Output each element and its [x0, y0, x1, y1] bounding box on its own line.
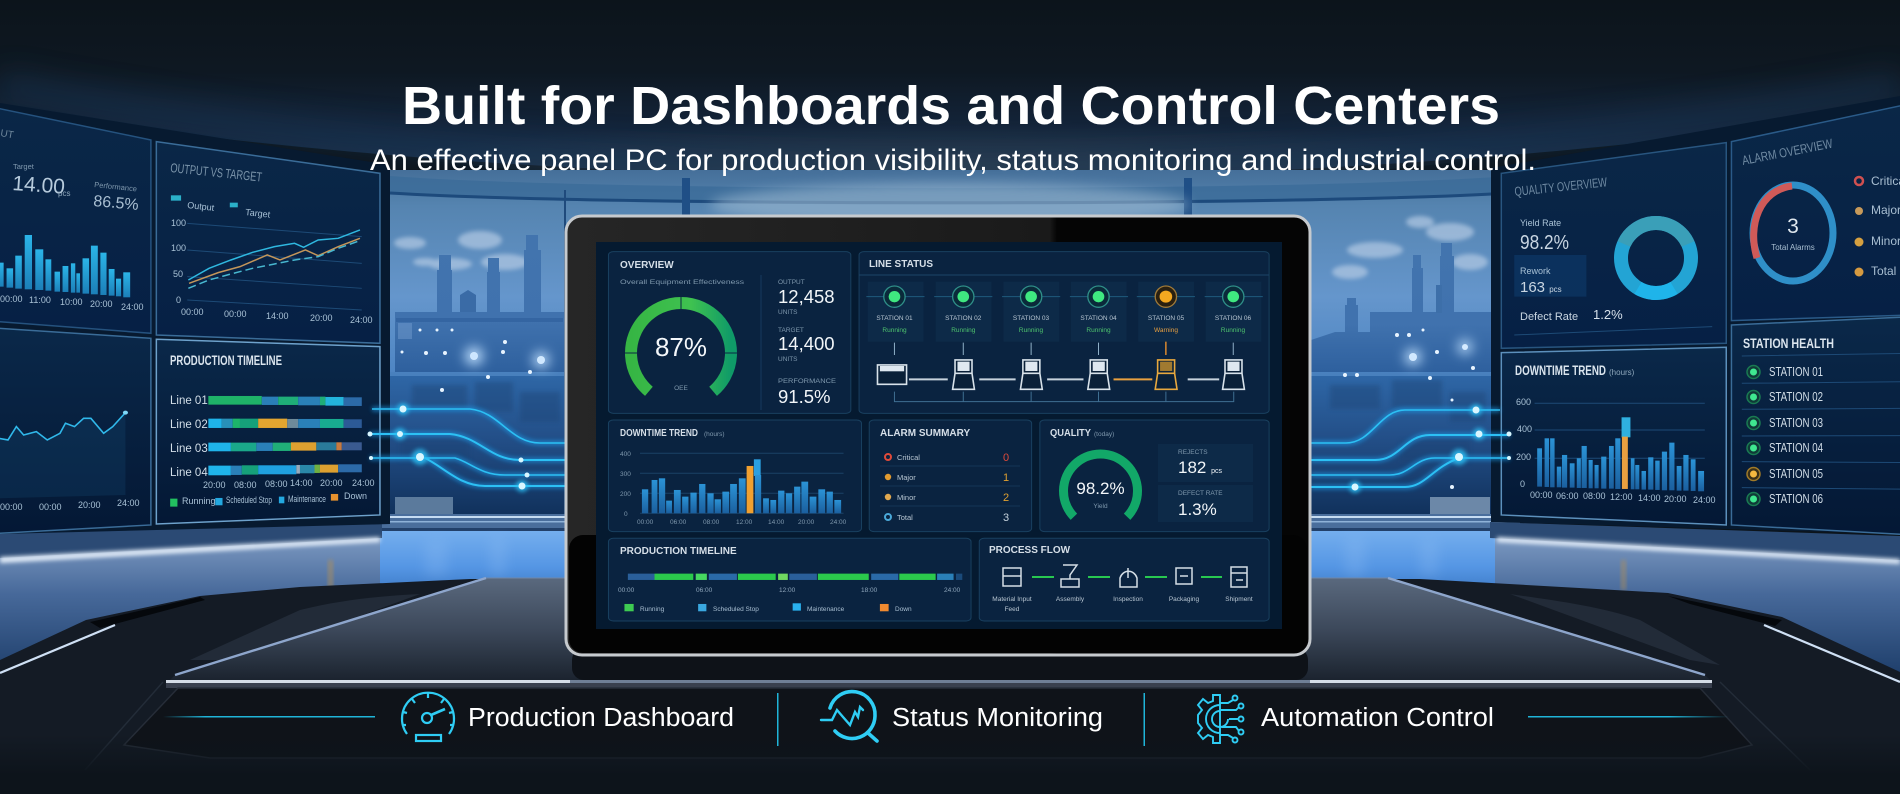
panel: line trend	[0, 328, 151, 533]
panel: production timeline bar: PRODUCTION TIMELINE	[620, 546, 737, 557]
gauge 87%: OEE	[674, 385, 689, 392]
panel: downtime trend chart: 0	[624, 511, 628, 518]
machines	[877, 360, 1244, 389]
panel: production timeline bar: 18:00	[861, 587, 878, 594]
panel: process flow: Feed	[1005, 606, 1020, 613]
panel: line status: STATION 05	[1148, 315, 1184, 322]
panel: line trend: 24:00	[117, 498, 140, 508]
panel: quality gauge	[1050, 428, 1253, 522]
panel: line status: STATION 06	[1215, 315, 1251, 322]
panel: line trend: 00:00	[0, 502, 23, 512]
panel: process flow	[989, 545, 1253, 613]
panel: production timeline: 14:00	[290, 478, 313, 488]
panel: line status: Running	[882, 327, 907, 334]
panel: station health: STATION 03	[1769, 416, 1823, 430]
title: Built for Dashboards and Control Centers	[402, 76, 1500, 136]
floor	[0, 522, 1900, 680]
panel: production timeline bar: 00:00	[618, 587, 635, 594]
side wall left	[0, 103, 390, 534]
icon: automation gear	[1198, 695, 1244, 743]
panel: output vs target: Target	[245, 207, 271, 220]
panel: station health: STATION 05	[1769, 467, 1823, 481]
panel: process flow: PROCESS FLOW	[989, 545, 1071, 556]
panel: quality gauge: 98.2%	[1076, 479, 1125, 498]
panel: production timeline: Running	[182, 496, 216, 506]
window: factory scene	[380, 170, 1520, 532]
panel: production timeline bar: Maintenance	[807, 606, 845, 613]
desk	[0, 578, 1900, 794]
panel: alarm summary: 1	[1003, 472, 1009, 484]
bezel	[566, 216, 1310, 655]
left factory silhouette	[395, 235, 566, 378]
panel: quality overview: Rework	[1520, 266, 1551, 276]
alarm ring	[1753, 185, 1833, 281]
panel: production timeline bar: Running	[640, 606, 665, 613]
panel: quality overview	[1501, 143, 1726, 348]
panel: production timeline: Line 03	[170, 443, 208, 455]
panel: downtime trend	[1501, 347, 1726, 525]
label: status monitoring: Status Monitoring	[892, 704, 1103, 732]
right display wall	[1501, 103, 1900, 535]
panel: alarm summary: 3	[1003, 512, 1009, 524]
data flow lines left	[368, 403, 567, 492]
panel: output chart: 24:00	[121, 302, 144, 312]
panel: output vs target: 00:00	[181, 307, 204, 317]
panel: overview: OVERVIEW	[620, 260, 674, 271]
panel: downtime trend: 08:00	[1583, 491, 1606, 501]
panel: line status: STATION 01	[876, 315, 913, 322]
label: production dashboard: Production Dashboard	[468, 704, 734, 732]
panel: production timeline: Scheduled Stop	[226, 495, 272, 505]
panel: production timeline: Down	[344, 491, 367, 501]
panel: output chart: 00:00	[0, 294, 23, 304]
panel: downtime trend: 600	[1516, 397, 1531, 407]
panel: production timeline bar: Scheduled Stop	[713, 606, 759, 613]
stats: 91.5%	[778, 386, 830, 407]
tablet shadow	[572, 648, 1308, 680]
panel: production timeline bar	[618, 546, 962, 613]
icon: status magnifier	[821, 692, 877, 741]
panel: downtime trend: 0	[1520, 479, 1525, 489]
panel: downtime trend: 24:00	[1693, 495, 1716, 505]
panel: downtime trend: 06:00	[1556, 491, 1579, 501]
panel: alarm overview: Total Alarms	[1771, 243, 1815, 252]
panel: line status	[859, 259, 1269, 402]
screen	[596, 242, 1282, 629]
panel: downtime trend: 00:00	[1530, 490, 1553, 500]
panel: line status: STATION 03	[1013, 315, 1049, 322]
panel: downtime trend: (hours)	[1609, 368, 1635, 377]
panel: quality gauge: 182 pcs	[1178, 458, 1222, 477]
gauge 87%: 87%	[655, 332, 707, 362]
stats: UNITS	[778, 309, 798, 316]
lower plant	[390, 372, 566, 518]
panel: production timeline	[156, 339, 380, 524]
panel: output vs target: 100	[171, 218, 186, 228]
panel: alarm summary	[880, 428, 1020, 524]
panel: downtime trend chart: 400	[620, 451, 631, 458]
panel: production timeline: Maintenance	[288, 494, 326, 504]
panel: downtime trend chart: 300	[620, 471, 631, 478]
panel: line status: Running	[951, 327, 976, 334]
panel: downtime trend chart: 20:00	[798, 519, 815, 526]
panel: line status: LINE STATUS	[869, 259, 933, 270]
panel: quality overview: QUALITY OVERVIEW	[1514, 174, 1608, 199]
panel: process flow: Inspection	[1113, 596, 1143, 603]
panel: output vs target	[156, 142, 380, 343]
stats: UNITS	[778, 356, 798, 363]
side wall right	[1491, 96, 1900, 534]
heading: OUTPUT VS TARGET	[170, 160, 263, 185]
panel: quality gauge: 1.3%	[1178, 500, 1217, 519]
panel: downtime trend: DOWNTIME TREND	[1515, 363, 1606, 378]
panel: downtime trend chart: 14:00	[768, 519, 785, 526]
subtitle: An effective panel PC for production visibility, status monitoring and industrial control.	[370, 144, 1536, 177]
panel: production timeline: 08:00	[265, 479, 288, 489]
panel: alarm summary: Minor	[897, 493, 916, 502]
stats: 14,400	[778, 333, 835, 354]
row 4	[208, 464, 362, 475]
panel: quality gauge: REJECTS	[1178, 449, 1208, 456]
panel: alarm summary: 2	[1003, 492, 1009, 504]
panel: line status: STATION 04	[1080, 315, 1117, 322]
panel: production timeline bar: 12:00	[779, 587, 796, 594]
panel: production timeline: Line 01	[170, 395, 208, 407]
panel: downtime trend: 200	[1516, 452, 1531, 462]
panel: production timeline: Line 02	[170, 419, 208, 431]
data flow lines right	[1311, 404, 1512, 493]
panel: output chart: pcs	[58, 189, 70, 198]
panel: alarm summary: Total	[897, 513, 913, 522]
heading: PRODUCTION TIMELINE	[170, 353, 282, 368]
label: automation control: Automation Control	[1261, 704, 1494, 732]
panel: downtime trend chart: 200	[620, 491, 631, 498]
panel: downtime trend: 400	[1517, 424, 1532, 434]
window sill	[380, 514, 1520, 532]
panel: alarm summary: Major	[897, 473, 916, 482]
panel: process flow: Material Input	[992, 596, 1032, 603]
panel: output vs target: 00:00	[224, 309, 247, 319]
status dots	[1747, 366, 1760, 506]
panel: production timeline: 08:00	[234, 480, 257, 490]
stats: 12,458	[778, 286, 835, 307]
panel: line status: Warning	[1154, 327, 1178, 334]
panel: process flow: Packaging	[1169, 596, 1200, 603]
panel: line status: Running	[1086, 327, 1111, 334]
panel: downtime trend chart	[620, 428, 847, 526]
panel: alarm overview: 3	[1787, 215, 1799, 238]
panel: overview: Overall Equipment Effectiveness	[620, 279, 745, 286]
panel: station health	[1731, 317, 1900, 535]
icon: gauge	[402, 693, 454, 741]
panel: quality overview: 163 pcs	[1520, 279, 1562, 296]
panel: line trend: 00:00	[39, 502, 62, 512]
panel: alarm summary: ALARM SUMMARY	[880, 428, 971, 439]
panel: downtime trend chart: 00:00	[637, 519, 654, 526]
panel: output chart: 20:00	[90, 299, 113, 309]
panel: output vs target: 14:00	[266, 311, 289, 321]
right factory silhouette	[1311, 243, 1492, 378]
panel: output vs target: 100	[171, 243, 186, 253]
row 2	[208, 419, 362, 428]
panel: station health: STATION 06	[1769, 492, 1823, 506]
panel: overview	[620, 260, 837, 410]
panel: output vs target: 24:00	[350, 315, 373, 325]
tablet panel PC	[566, 216, 1310, 655]
panel: downtime trend chart: (hours)	[704, 431, 725, 438]
panel: output vs target: 20:00	[310, 313, 333, 323]
panel: production timeline bar: 24:00	[944, 587, 961, 594]
panel: downtime trend chart: 24:00	[830, 519, 847, 526]
panel: output chart	[0, 108, 151, 333]
panel: downtime trend chart: 12:00	[736, 519, 753, 526]
panel: output chart: 11:00	[29, 295, 51, 305]
panel: downtime trend: 14:00	[1638, 493, 1661, 503]
panel: output vs target: Output	[187, 200, 215, 213]
panel: output chart: Performance	[94, 180, 137, 193]
panel: quality gauge: DEFECT RATE	[1178, 490, 1223, 497]
panel: alarm overview: Total	[1871, 264, 1896, 278]
panel: production timeline: 24:00	[352, 478, 375, 488]
timeline legend swatches	[170, 494, 338, 507]
stats: TARGET	[778, 327, 804, 334]
panel: alarm summary: Critical	[897, 453, 920, 462]
feature bar	[163, 692, 1729, 746]
panel: line status: Running	[1019, 327, 1043, 334]
panel: output chart: 10:00	[60, 297, 83, 307]
panel: alarm overview	[1731, 103, 1900, 321]
panel: quality overview: 98.2%	[1520, 232, 1569, 254]
panel: production timeline: 20:00	[203, 480, 226, 490]
panel: production timeline: 20:00	[320, 478, 343, 488]
panel: quality gauge: (today)	[1094, 431, 1114, 438]
gauge 87%	[625, 297, 737, 392]
stats: OUTPUT	[778, 279, 805, 286]
flow arrows	[894, 343, 1233, 355]
panel: quality gauge: Yield	[1093, 503, 1108, 510]
panel: output vs target: 0	[176, 295, 181, 305]
panel: process flow: Assembly	[1056, 596, 1085, 603]
panel: alarm summary: 0	[1003, 452, 1009, 464]
panel: process flow: Shipment	[1225, 596, 1253, 603]
panel: downtime trend: 20:00	[1664, 494, 1687, 504]
panel: line trend: 20:00	[78, 500, 101, 510]
clouds	[394, 216, 1488, 279]
panel: production timeline bar: 06:00	[696, 587, 713, 594]
ceiling	[0, 0, 1900, 185]
panel: production timeline: Line 04	[170, 467, 208, 479]
panel: quality overview: Defect Rate	[1520, 311, 1578, 323]
row 3	[208, 442, 362, 451]
row 1	[208, 396, 362, 406]
panel: downtime trend chart: 08:00	[703, 519, 720, 526]
panel: production timeline bar: Down	[895, 606, 912, 613]
stats: PERFORMANCE	[778, 378, 837, 385]
donut	[1621, 223, 1691, 293]
belts	[909, 378, 1219, 380]
panel: line status: Running	[1221, 327, 1245, 334]
stats	[778, 279, 837, 407]
panel: downtime trend chart: 06:00	[670, 519, 687, 526]
panel: quality overview: Yield Rate	[1520, 218, 1561, 228]
panel: station health: STATION HEALTH	[1743, 336, 1834, 351]
panel: output chart: 86.5%	[93, 193, 139, 214]
panel: station health: STATION 04	[1769, 441, 1823, 455]
panel: station health: STATION 01	[1769, 365, 1823, 379]
panel: station health: STATION 02	[1769, 390, 1823, 404]
left display wall	[0, 108, 380, 533]
value: 14.00	[12, 172, 66, 199]
panel: downtime trend: 12:00	[1610, 492, 1633, 502]
panel: quality gauge: QUALITY	[1050, 428, 1091, 439]
panel: output chart: Target	[13, 162, 35, 171]
panel: alarm overview: ALARM OVERVIEW	[1741, 136, 1834, 168]
panel: downtime trend chart: DOWNTIME TREND	[620, 428, 698, 439]
panel: line status: STATION 02	[945, 315, 982, 322]
plant lights	[400, 328, 1475, 489]
panel: output vs target: 50	[173, 269, 183, 279]
panel: quality overview: 1.2%	[1593, 307, 1623, 322]
